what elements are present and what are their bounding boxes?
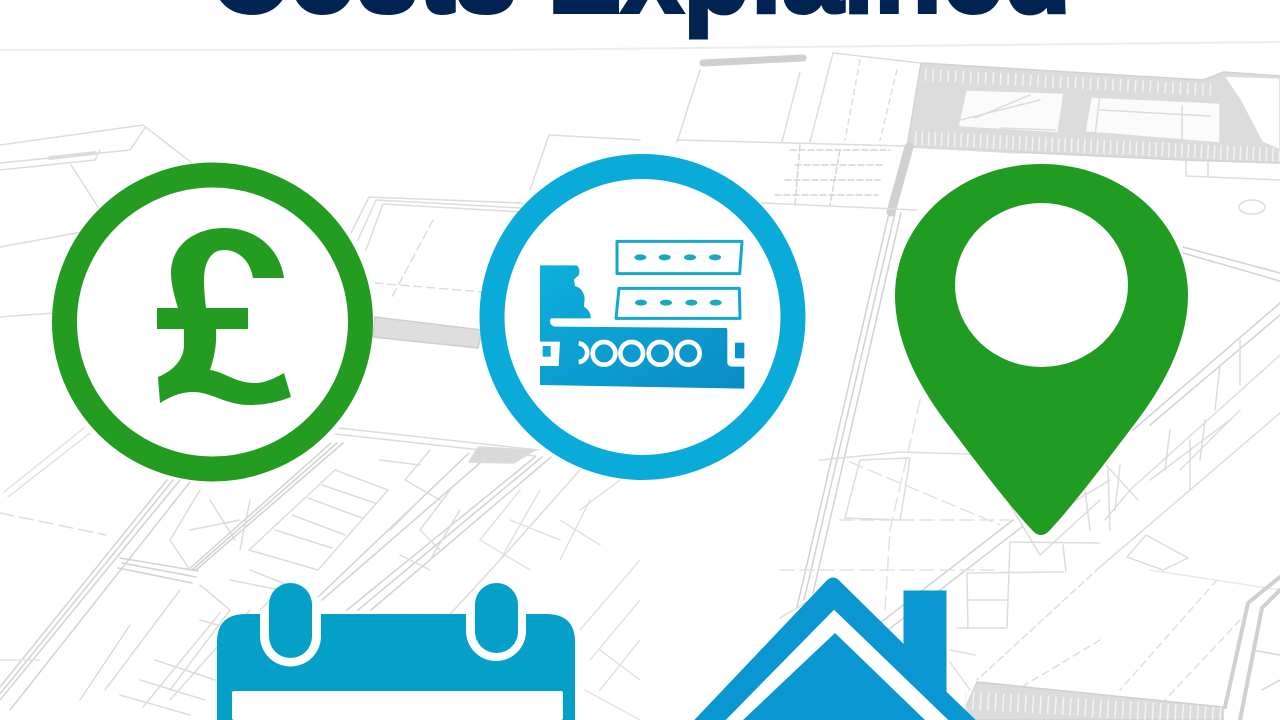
server rack lower bbox=[616, 288, 740, 318]
top-right roof band bbox=[907, 63, 1280, 214]
icon: house with chimney bbox=[695, 578, 975, 720]
middle frame bbox=[351, 197, 522, 348]
bottom-left diagonal structure bbox=[0, 428, 640, 720]
machinery base bbox=[540, 265, 744, 389]
server rack upper bbox=[617, 241, 742, 274]
lower-right plan bbox=[780, 247, 1280, 720]
icon: calendar bbox=[217, 583, 575, 720]
icon: server and machinery in blue ring bbox=[492, 166, 793, 468]
icon: pound sterling in green ring bbox=[64, 175, 360, 469]
icon: location pin bbox=[895, 164, 1188, 535]
top-left building outline bbox=[0, 125, 192, 317]
white centre of location pin bbox=[955, 203, 1128, 367]
